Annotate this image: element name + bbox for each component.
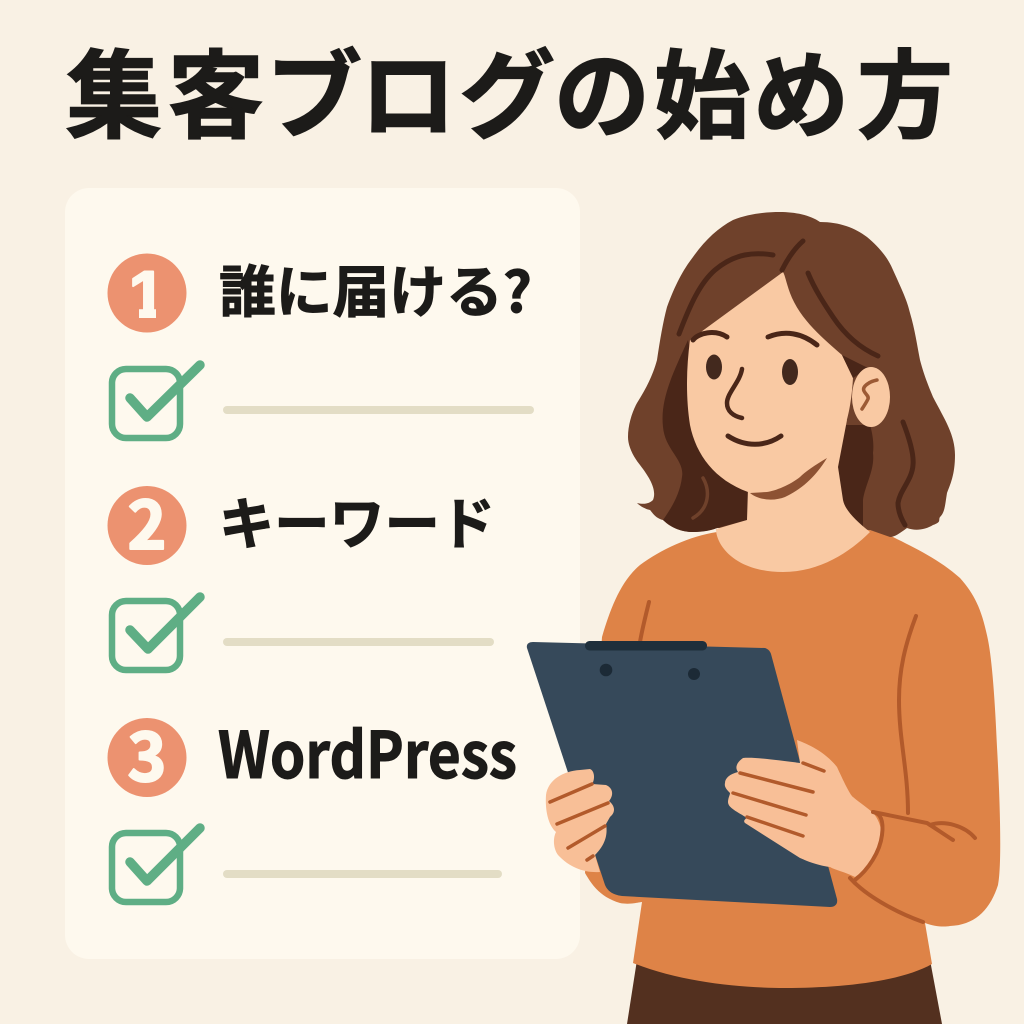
number badge 1: 1	[129, 257, 165, 331]
hair shadow by ear	[842, 355, 868, 378]
sweater folds	[640, 602, 975, 922]
text placeholder line 3	[223, 870, 502, 878]
heading 1: 誰に届ける?	[219, 248, 532, 329]
trousers	[627, 960, 942, 1024]
sweater	[585, 530, 1000, 988]
light hair strand	[693, 478, 707, 518]
number badge 3	[108, 705, 186, 801]
chin shadow	[750, 458, 827, 500]
heading 3: WordPress	[218, 705, 517, 797]
right hand	[725, 740, 882, 877]
title: 集客ブログの始め方	[66, 19, 953, 158]
sweater cuff	[855, 812, 883, 880]
hair shadow right	[838, 425, 873, 528]
hair strands	[679, 241, 913, 525]
panel: checklist	[65, 188, 580, 959]
text placeholder line 2	[223, 638, 494, 646]
left hand	[546, 769, 614, 872]
eyebrows	[693, 333, 817, 345]
mouth	[728, 436, 781, 444]
number badge 1	[108, 254, 186, 332]
eyes	[706, 354, 798, 385]
number badge 2: 2	[128, 473, 166, 569]
ear	[852, 367, 890, 427]
nose	[727, 369, 742, 418]
check icon 3	[112, 828, 200, 902]
step 2	[108, 473, 495, 670]
text placeholder line 1	[223, 406, 534, 414]
hair	[628, 212, 955, 537]
number badge 3: 3	[128, 705, 166, 801]
heading 2: キーワード	[219, 480, 495, 561]
illustration: woman with clipboard	[527, 212, 1000, 1024]
clipboard	[527, 641, 837, 907]
step 3	[108, 705, 517, 902]
number badge 2	[108, 473, 186, 569]
face	[687, 272, 853, 493]
step 1	[108, 248, 534, 438]
neck	[716, 420, 870, 572]
check icon 2	[112, 597, 200, 670]
check icon 1	[112, 365, 200, 438]
hair shadow left	[663, 340, 750, 532]
